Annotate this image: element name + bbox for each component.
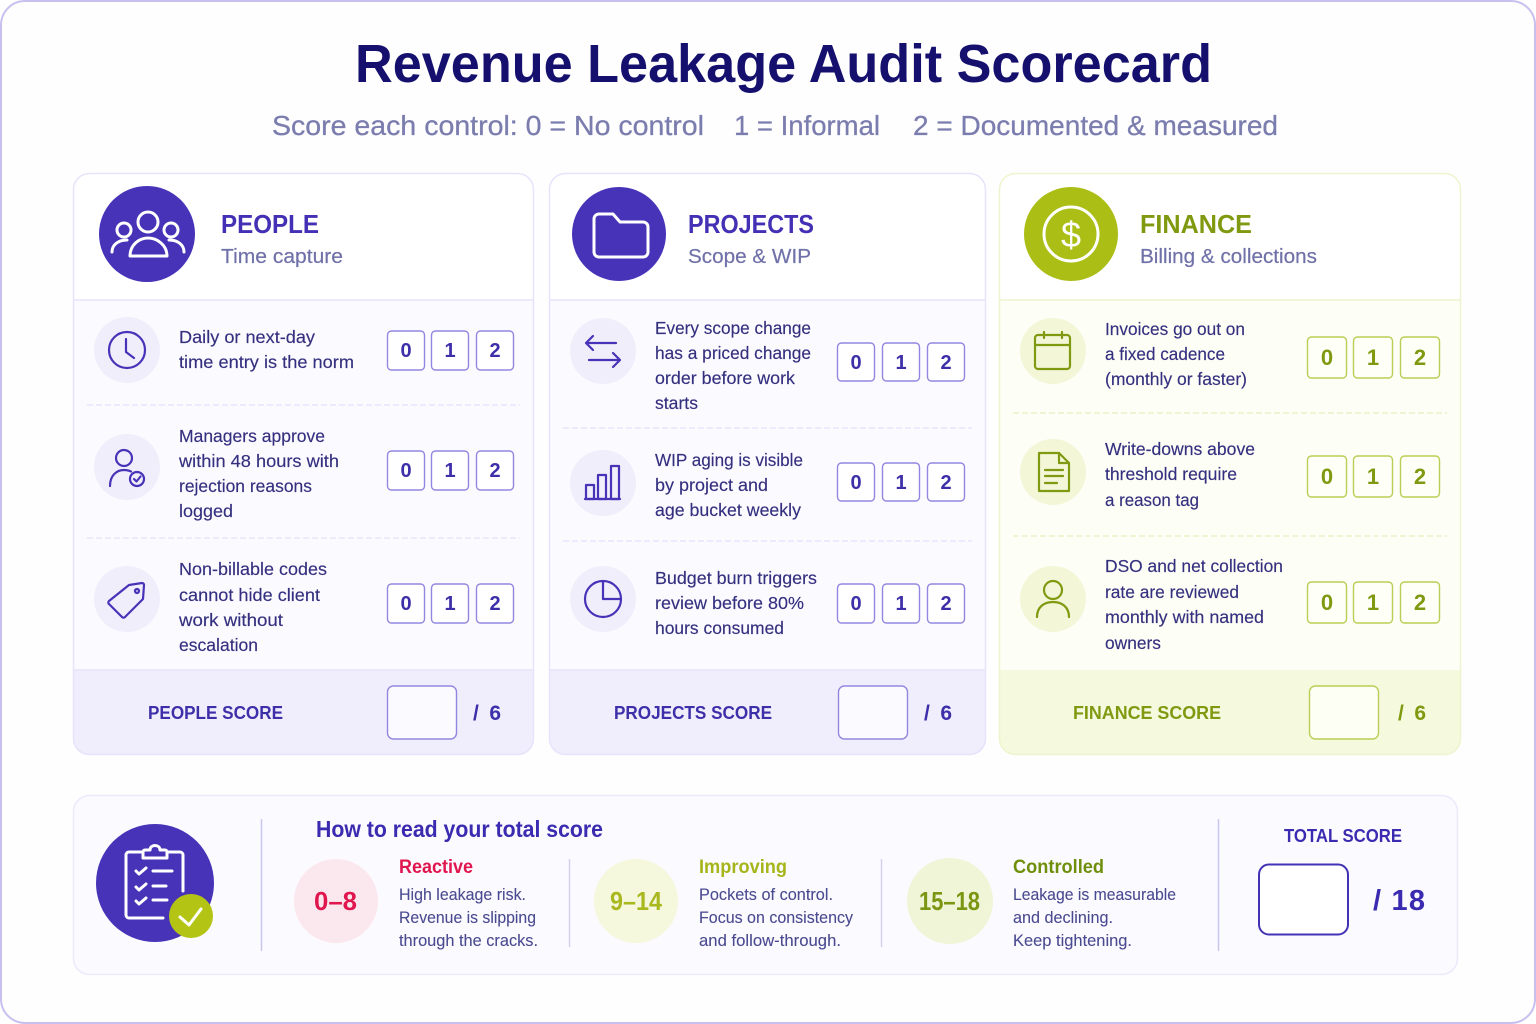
control: scope change: order before work	[655, 368, 795, 388]
control: scope change: 0	[850, 352, 862, 374]
control: DSO review: 0	[1321, 590, 1333, 615]
footer: finance score: / 6	[1398, 702, 1426, 725]
band: improving: Pockets of control.	[699, 886, 833, 904]
subtitle: scoring scale: 2 = Documented & measured	[913, 110, 1278, 141]
control: budget burn: review before 80%	[655, 593, 804, 613]
control: budget burn: hours consumed	[655, 618, 784, 638]
control: manager approval: 1	[444, 460, 456, 482]
control: daily time entry: 1	[444, 340, 456, 362]
icon: people group	[99, 186, 195, 282]
band: reactive: High leakage risk.	[399, 886, 526, 904]
heading: finance: FINANCE	[1140, 209, 1252, 239]
icon: folder	[572, 187, 666, 281]
control: non-billable codes: cannot hide client	[179, 585, 320, 605]
band: controlled	[907, 857, 1176, 950]
band: controlled: Keep tightening.	[1013, 932, 1132, 950]
control: non-billable codes: escalation	[179, 635, 258, 655]
band: controlled: Leakage is measurable	[1013, 886, 1176, 904]
heading: people: Time capture	[221, 246, 343, 268]
control: invoice cadence: (monthly or faster)	[1105, 369, 1247, 389]
heading: how to read: How to read your total score	[316, 816, 603, 842]
control: budget burn: Budget burn triggers	[655, 568, 817, 588]
control: WIP aging: by project and	[655, 475, 768, 495]
heading: people	[221, 209, 343, 268]
control: WIP aging: 2	[940, 472, 952, 494]
heading: finance	[1140, 209, 1317, 268]
control: scope change: 1	[895, 352, 907, 374]
footer: people score: / 6	[473, 702, 501, 725]
control: WIP aging: 0	[850, 472, 862, 494]
control: DSO review: 2	[1414, 590, 1426, 615]
total score box: TOTAL SCORE	[1284, 826, 1402, 846]
heading: projects	[688, 209, 814, 268]
control: write-downs: 1	[1367, 464, 1379, 489]
control: scope change: Every scope change	[655, 318, 811, 338]
control: daily time entry: 2	[489, 340, 501, 362]
panel: finance	[999, 173, 1461, 755]
control: scope change: 2	[940, 352, 952, 374]
control: budget burn: 2	[940, 593, 952, 615]
control: scope change: starts	[655, 393, 698, 413]
control: manager approval	[94, 426, 514, 521]
control: write-downs: 2	[1414, 464, 1426, 489]
band: improving	[594, 857, 854, 950]
control: invoice cadence	[1020, 318, 1440, 389]
band: reactive	[294, 857, 538, 950]
control: manager approval: within 48 hours with	[178, 451, 339, 471]
control: write-downs: threshold require	[1105, 464, 1237, 484]
control: invoice cadence: Invoices go out on	[1105, 319, 1245, 339]
control: budget burn: 0	[850, 593, 862, 615]
control: DSO review: owners	[1105, 633, 1161, 653]
panel: people	[73, 173, 534, 755]
band: improving: and follow-through.	[699, 932, 841, 950]
band: improving: Focus on consistency	[699, 909, 854, 927]
control: daily time entry	[94, 317, 514, 383]
band: controlled: and declining.	[1013, 909, 1113, 927]
icon: dollar coin	[1024, 187, 1118, 281]
control: non-billable codes: 1	[444, 593, 456, 615]
control: non-billable codes: 2	[489, 593, 501, 615]
control: write-downs: 0	[1321, 464, 1333, 489]
control: non-billable codes: Non-billable codes	[179, 559, 327, 579]
control: WIP aging: 1	[895, 472, 907, 494]
control: scope change	[570, 318, 964, 413]
band: reactive: through the cracks.	[399, 932, 538, 950]
footer: finance score: FINANCE SCORE	[1073, 703, 1221, 723]
control: write-downs: a reason tag	[1105, 490, 1199, 510]
control: manager approval: 2	[489, 460, 501, 482]
control: budget burn: 1	[895, 593, 907, 615]
control: non-billable codes	[94, 559, 514, 655]
band: reactive: Reactive	[399, 857, 473, 878]
control: DSO review: rate are reviewed	[1105, 582, 1239, 602]
panel: total score guide	[74, 796, 1458, 974]
control: invoice cadence: 2	[1414, 345, 1426, 370]
control: daily time entry: Daily or next-day	[179, 327, 315, 347]
icon: clipboard checklist	[96, 824, 214, 942]
subtitle: scoring scale	[272, 110, 1278, 141]
band: improving: Improving	[699, 857, 787, 878]
control: manager approval: 0	[400, 460, 412, 482]
subtitle: scoring scale: Score each control: 0 = No control	[272, 110, 704, 141]
control: DSO review	[1020, 556, 1440, 653]
control: manager approval: rejection reasons	[179, 476, 312, 496]
control: non-billable codes: 0	[400, 593, 412, 615]
icon: dollar coin: $	[1061, 214, 1081, 255]
band: improving: 9–14	[610, 886, 662, 916]
control: WIP aging: age bucket weekly	[655, 500, 801, 520]
footer: projects score: / 6	[924, 702, 952, 725]
control: DSO review: monthly with named	[1105, 607, 1264, 627]
control: manager approval: Managers approve	[179, 426, 325, 446]
control: invoice cadence: 0	[1321, 345, 1333, 370]
band: reactive: Revenue is slipping	[399, 909, 536, 927]
title: Revenue Leakage Audit Scorecard	[355, 34, 1212, 94]
footer: projects score	[614, 686, 952, 739]
heading: finance: Billing & collections	[1140, 246, 1317, 268]
control: non-billable codes: work without	[178, 610, 283, 630]
control: scope change: has a priced change	[655, 343, 811, 363]
control: manager approval: logged	[179, 501, 233, 521]
control: write-downs: Write-downs above	[1105, 439, 1255, 459]
control: WIP aging: WIP aging is visible	[655, 450, 803, 470]
heading: people: PEOPLE	[221, 209, 319, 239]
control: daily time entry: time entry is the norm	[179, 352, 354, 372]
control: budget burn	[570, 566, 964, 638]
control: DSO review: 1	[1367, 590, 1379, 615]
band: reactive: 0–8	[314, 886, 357, 916]
panel: projects	[549, 173, 986, 755]
control: write-downs	[1020, 439, 1440, 510]
heading: projects: PROJECTS	[688, 209, 814, 239]
control: invoice cadence: 1	[1367, 345, 1379, 370]
footer: people score: PEOPLE SCORE	[148, 703, 283, 723]
band: controlled: 15–18	[919, 886, 980, 916]
control: WIP aging	[570, 450, 964, 520]
subtitle: scoring scale: 1 = Informal	[734, 110, 880, 141]
control: daily time entry: 0	[400, 340, 412, 362]
footer: finance score	[1073, 686, 1426, 739]
footer: projects score: PROJECTS SCORE	[614, 703, 772, 723]
total score box: / 18	[1373, 885, 1425, 917]
total score box	[1259, 826, 1425, 934]
control: invoice cadence: a fixed cadence	[1105, 344, 1225, 364]
heading: projects: Scope & WIP	[688, 246, 811, 268]
control: DSO review: DSO and net collection	[1105, 556, 1283, 576]
band: controlled: Controlled	[1013, 857, 1104, 878]
footer: people score	[148, 686, 501, 739]
